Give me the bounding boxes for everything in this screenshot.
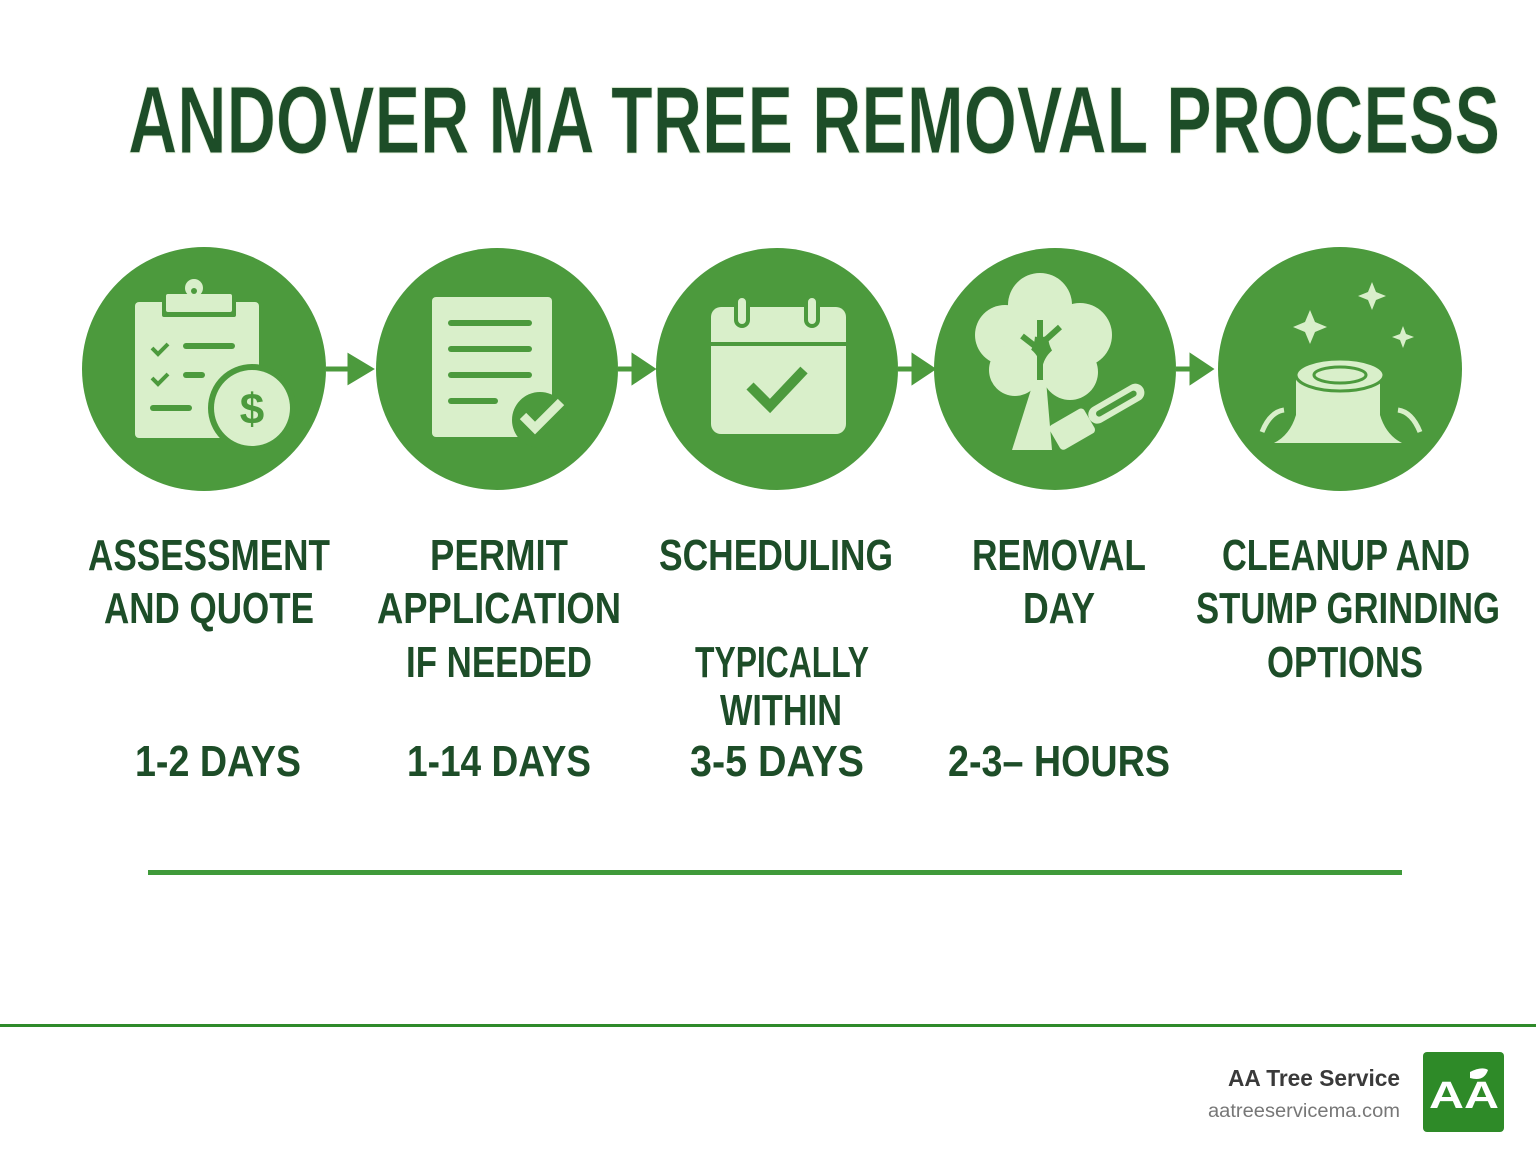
label 3: SCHEDULING (659, 531, 893, 580)
footer brand text (1208, 1065, 1400, 1122)
step 5 icon: stump with sparkles (1218, 247, 1462, 491)
label 1: 1-2 DAYS (135, 737, 301, 786)
step labels (88, 531, 1500, 786)
label 4: 2-3– HOURS (948, 737, 1170, 786)
label 3: 3-5 DAYS (690, 737, 864, 786)
step 1 icon: clipboard with dollar: $ (240, 385, 264, 434)
label 3: WITHIN (720, 686, 842, 735)
label 1 (88, 531, 330, 786)
footer brand text: aatreeservicema.com (1208, 1101, 1400, 1122)
footer logo (1423, 1052, 1504, 1132)
arrow 4 (1176, 357, 1210, 381)
label 2: APPLICATION (377, 584, 621, 633)
arrow 2 (618, 357, 652, 381)
label 5: OPTIONS (1267, 638, 1423, 687)
label 2: IF NEEDED (406, 638, 592, 687)
label 4: REMOVAL (972, 531, 1146, 580)
label 2 (377, 531, 621, 786)
arrow 1 (326, 357, 370, 381)
step 2 icon: document with check (376, 248, 618, 490)
label 3: TYPICALLY (695, 638, 869, 687)
label 5 (1196, 531, 1500, 687)
label 3 (659, 531, 893, 786)
label 4: DAY (1023, 584, 1095, 633)
label 1: AND QUOTE (104, 584, 314, 633)
step 3 icon: calendar with check (656, 248, 898, 490)
label 2: 1-14 DAYS (407, 737, 591, 786)
arrow 3 (898, 357, 932, 381)
label 4 (948, 531, 1170, 786)
label 5: CLEANUP AND (1222, 531, 1470, 580)
label 1: ASSESSMENT (88, 531, 330, 580)
step 1 icon: clipboard with dollar (82, 247, 326, 491)
label 2: PERMIT (430, 531, 568, 580)
footer brand text: AA Tree Service (1228, 1065, 1400, 1091)
step 4 icon: tree and chainsaw (934, 248, 1176, 490)
footer logo: AA (1429, 1075, 1499, 1117)
